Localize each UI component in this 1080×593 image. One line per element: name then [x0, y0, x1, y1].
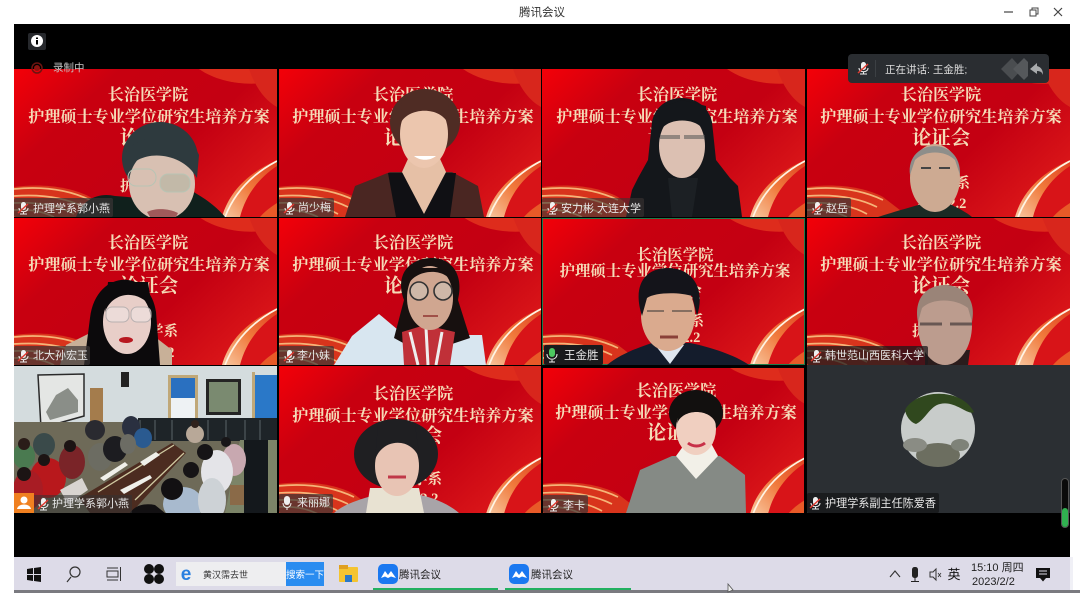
tile: 赵岳: 论证会: [912, 127, 971, 149]
name label: 护理学系郭小燕 conference room: [14, 493, 132, 513]
name label: 李小妹: 李小妹: [297, 348, 330, 362]
name label: 韩世范山西医科大学: 韩世范山西医科大学: [825, 348, 924, 362]
tile: 护理学系郭小燕: 护理学系: [120, 177, 178, 195]
tile: 护理学系副主任陈爱香: [807, 365, 1070, 513]
system tray: 英: [947, 567, 961, 582]
tile: 安力彬 大连大学: 长治医学院: [637, 85, 717, 104]
name label: 护理学系郭小燕: [14, 198, 113, 217]
tile: 北大孙宏玉: [14, 218, 277, 365]
name label: 尚少梅: 尚少梅: [298, 200, 331, 214]
icon: active microphone: [547, 348, 557, 362]
tile: 王金胜: [542, 218, 805, 365]
name label: 来丽娜: 来丽娜: [297, 495, 330, 509]
tile: 北大孙宏玉: 护理硕士专业学位研究生培养方案: [28, 255, 270, 274]
tile: 韩世范山西医科大学: 长治医学院: [901, 233, 981, 252]
name label: 李小妹: [279, 346, 334, 365]
search widget: 黄汉霈去世: [203, 569, 248, 580]
tile: 尚少梅: 护理硕士专业学位研究生培养方案: [292, 107, 534, 126]
search widget: [176, 562, 324, 586]
name label: 尚少梅: [279, 198, 334, 217]
title bar: [519, 5, 1062, 19]
name label: 北大孙宏玉: [14, 346, 90, 365]
tile: 赵岳: 护理硕士专业学位研究生培养方案: [820, 107, 1062, 126]
tile: 赵岳: 护理学系: [912, 174, 970, 192]
tile: 来丽娜: 护理硕士专业学位研究生培养方案: [292, 406, 534, 425]
name label: 王金胜: [544, 345, 603, 365]
tile: 李小妹: 长治医学院: [373, 233, 453, 252]
volume meter: [1062, 478, 1068, 528]
tile: 来丽娜: 2023.2.2: [388, 491, 438, 507]
tile: 赵岳: [807, 69, 1070, 217]
tile: 北大孙宏玉: 护理学系: [120, 322, 178, 340]
search widget: e: [181, 564, 191, 585]
tile: conference room photo: [14, 366, 277, 513]
name label: 李卡: [543, 495, 588, 513]
tile: 韩世范山西医科大学: 护理学系: [912, 322, 970, 340]
tile: 来丽娜: 护理学系: [384, 470, 442, 488]
recording status: 录制中: [53, 61, 84, 74]
tile: 李小妹: 论证会: [384, 275, 443, 297]
tile: 北大孙宏玉: 2023.2.2: [124, 345, 174, 361]
name label: 赵岳: [807, 198, 851, 217]
name label: 北大孙宏玉: 北大孙宏玉: [33, 348, 88, 362]
tile: 尚少梅: [279, 69, 541, 217]
icon: pinwheel app: [144, 564, 164, 584]
tile: 王金胜: 2023.2.2: [650, 330, 700, 346]
taskbar: [14, 557, 1080, 593]
tile: 赵岳: 长治医学院: [901, 85, 981, 104]
tile: 赵岳: 2023.2.2: [916, 196, 966, 212]
tile: 李卡: 护理硕士专业学位研究生培养方案: [555, 403, 797, 422]
tile: 韩世范山西医科大学: 论证会: [912, 275, 971, 297]
name label: 护理学系郭小燕: 护理学系郭小燕: [33, 201, 110, 215]
tile: 来丽娜: 论证会: [384, 425, 443, 447]
app button 2: [505, 564, 631, 590]
name label: 赵岳: 赵岳: [826, 201, 848, 215]
icon: windows start: [27, 567, 41, 582]
tile: 安力彬 大连大学: [542, 69, 805, 217]
title bar: 腾讯会议: [519, 5, 565, 19]
tile: 来丽娜: 长治医学院: [373, 384, 453, 403]
tile: 韩世范山西医科大学: [807, 218, 1070, 365]
name label: 来丽娜: [279, 494, 333, 513]
system tray: 15:10 周四: [971, 561, 1024, 574]
icon: cursor: [728, 584, 733, 592]
app button 1: 腾讯会议: [399, 568, 441, 581]
name label: 护理学系副主任陈爱香: [807, 493, 939, 513]
speaker status panel: [848, 54, 1049, 83]
tile: 安力彬 大连大学: 论证会: [648, 127, 707, 149]
tile: 李卡: [543, 368, 804, 513]
tile: 护理学系郭小燕: 长治医学院: [108, 85, 188, 104]
tile: 王金胜: 论证会: [648, 281, 702, 302]
tile: 李卡: 长治医学院: [636, 381, 716, 400]
tile: 安力彬 大连大学: 护理硕士专业学位研究生培养方案: [556, 107, 798, 126]
icon: task view: [107, 567, 120, 581]
app button 1: [373, 564, 498, 590]
tile: 王金胜: 护理学系: [646, 312, 704, 330]
icon: host badge: [14, 493, 34, 513]
name label: 护理学系副主任陈爱香: 护理学系副主任陈爱香: [825, 496, 936, 510]
tile: 韩世范山西医科大学: 护理硕士专业学位研究生培养方案: [820, 255, 1062, 274]
tile: 韩世范山西医科大学: 2023.2.2: [916, 345, 966, 361]
tile: 李小妹: 护理硕士专业学位研究生培养方案: [292, 255, 534, 274]
tile: 北大孙宏玉: 论证会: [120, 275, 179, 297]
tile: 尚少梅: 长治医学院: [373, 85, 453, 104]
icon: search: [67, 567, 80, 582]
icon: info: [28, 33, 46, 50]
speaker status panel: 正在讲话: 王金胜;: [885, 63, 967, 76]
name label: 韩世范山西医科大学: [807, 346, 928, 365]
tile: 王金胜: 长治医学院: [637, 245, 714, 264]
tile: 来丽娜: [279, 366, 541, 513]
name label: 李卡: 李卡: [563, 498, 585, 512]
search widget: 搜索一下: [286, 569, 324, 581]
name label: 安力彬: [542, 198, 644, 217]
tile: 护理学系郭小燕: 护理硕士专业学位研究生培养方案: [28, 107, 270, 126]
tile: 护理学系郭小燕: 2023.2.2: [124, 198, 174, 214]
icon: folder: [339, 565, 358, 582]
system tray: 2023/2/2: [972, 576, 1015, 588]
app button 2: 腾讯会议: [531, 568, 573, 581]
name label: 王金胜: 王金胜: [564, 348, 599, 362]
name label: 护理学系郭小燕 conference room: 护理学系郭小燕: [52, 496, 129, 510]
tile: 护理学系郭小燕: 论证会: [120, 127, 179, 149]
recording status: [32, 61, 84, 74]
system tray: [890, 561, 1050, 588]
tile: 王金胜: 护理硕士专业学位研究生培养方案: [560, 261, 791, 280]
tile: 尚少梅: 论证会: [384, 127, 443, 149]
tile: 李卡: 论证会: [647, 422, 706, 444]
tile: 北大孙宏玉: 长治医学院: [108, 233, 188, 252]
tile: 李小妹: [279, 218, 541, 365]
icon: microphone: [283, 496, 291, 510]
name label: 安力彬: 安力彬 大连大学: [561, 201, 641, 215]
tile: 护理学系郭小燕: [14, 69, 277, 217]
avatar: [901, 392, 975, 467]
